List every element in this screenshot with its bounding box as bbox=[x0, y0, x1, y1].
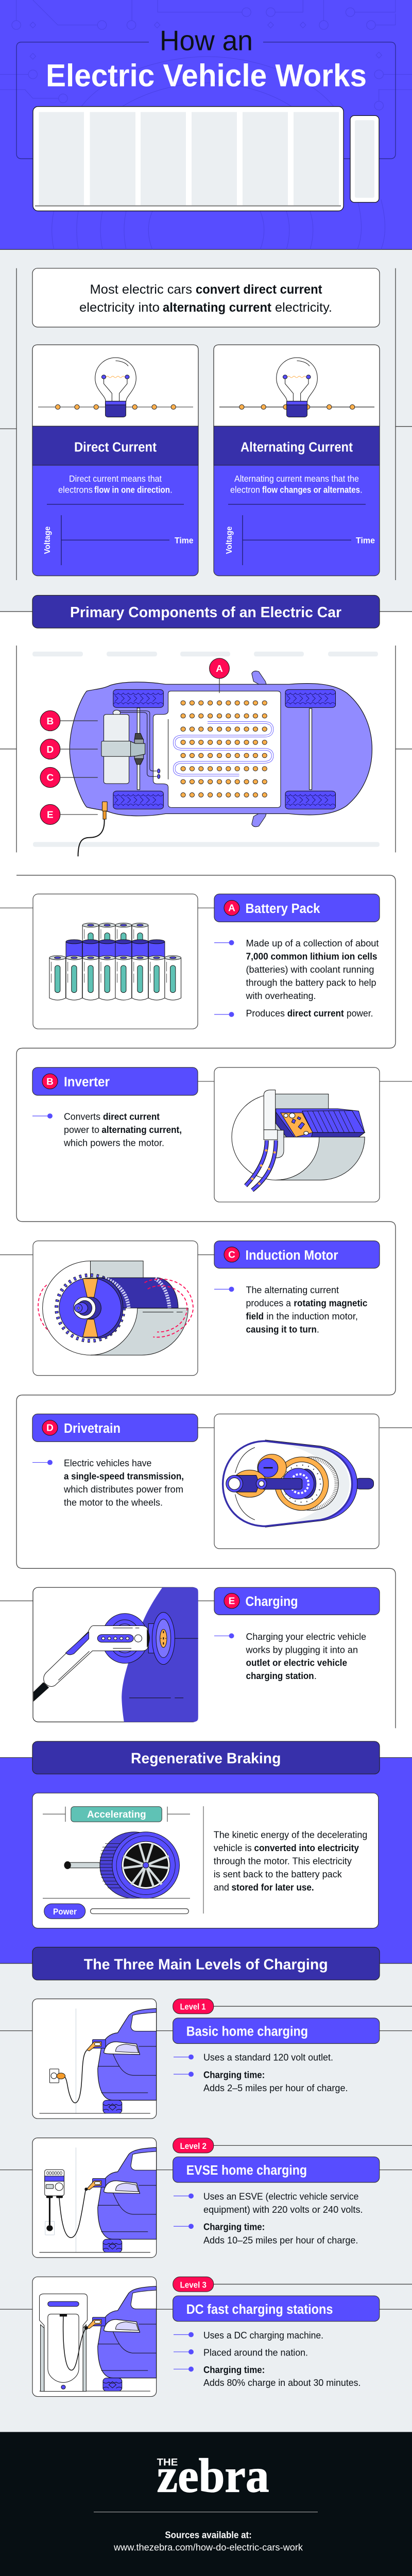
chart: direct current axes: Time bbox=[175, 536, 194, 546]
panel: alternating current bbox=[214, 345, 380, 576]
intro callout: electricity into bbox=[79, 301, 160, 315]
chart: alternating current axes bbox=[225, 515, 375, 565]
heading: three levels bbox=[32, 1947, 380, 1980]
panel: alternating current: Alternating current means that the bbox=[234, 473, 359, 484]
text: inverter bullet: power to bbox=[64, 1124, 99, 1135]
heading: basic home charging: Basic home charging bbox=[186, 2024, 308, 2039]
heading: battery pack: Battery Pack bbox=[245, 902, 320, 916]
footer logo: zebra bbox=[157, 2449, 269, 2502]
badge letters: C bbox=[47, 772, 54, 783]
panel: inverter image bbox=[214, 1067, 380, 1202]
badge letters: D bbox=[47, 744, 54, 755]
panel: direct current bbox=[32, 345, 198, 576]
panel: direct current: flow in one direction bbox=[94, 485, 170, 495]
connector lines: levels bbox=[0, 2006, 412, 2309]
heading: three levels: The Three Main Levels of Charging bbox=[84, 1957, 328, 1973]
icon: level 1 car at wall outlet bbox=[40, 2009, 157, 2113]
text: induction motor bullet: The alternating current bbox=[246, 1284, 339, 1295]
chart: direct current axes: Voltage bbox=[43, 526, 52, 554]
footer sources bbox=[113, 2530, 303, 2552]
panel: induction motor image bbox=[33, 1241, 198, 1376]
road dashes bbox=[32, 652, 380, 847]
title bbox=[46, 25, 367, 93]
chart: direct current axes bbox=[43, 515, 193, 565]
battery pack floor bbox=[153, 691, 281, 807]
text: charging bullet: . bbox=[314, 1670, 317, 1681]
icon: wheel bbox=[64, 1832, 179, 1899]
text: charging bullet: charging station bbox=[246, 1670, 314, 1681]
motor and drivetrain bbox=[101, 710, 160, 784]
title: Electric Vehicle Works bbox=[46, 58, 367, 93]
heading: inverter bbox=[32, 1067, 198, 1095]
intro callout: alternating current bbox=[163, 301, 271, 315]
heading: induction motor bbox=[214, 1241, 380, 1268]
heading: primary components bbox=[32, 596, 380, 628]
text: level 2 bullets: Adds 10–25 miles per hour of charge. bbox=[203, 2234, 358, 2245]
power bar: Power bbox=[53, 1907, 77, 1917]
badge letters: A bbox=[216, 663, 223, 674]
text: level 3 bullets: Uses a DC charging machine. bbox=[203, 2330, 323, 2341]
icon: level 2 car at home charger bbox=[40, 2147, 157, 2252]
text: battery pack bullets: with overheating. bbox=[246, 990, 316, 1001]
header frame bbox=[16, 42, 396, 159]
charger display digits: 000000 bbox=[46, 2171, 62, 2176]
text: induction motor bullet: causing it to turn bbox=[246, 1324, 317, 1335]
text: level 3 bullets bbox=[174, 2330, 360, 2388]
panel: level 2 image bbox=[32, 2138, 157, 2258]
text: level 2 bullets bbox=[174, 2191, 363, 2245]
heading: EVSE home charging: EVSE home charging bbox=[186, 2163, 307, 2178]
badge letters: B bbox=[47, 716, 54, 726]
heading: DC fast charging bbox=[173, 2296, 380, 2321]
text: induction motor bullet: field bbox=[246, 1311, 264, 1321]
text: regenerative explanation: converted into electricity bbox=[254, 1842, 359, 1853]
heading: primary components: Primary Components of an Electric Car bbox=[70, 604, 341, 621]
text: regenerative explanation: is sent back to the battery pack bbox=[214, 1869, 342, 1879]
footer sources: www.thezebra.com/how-do-electric-cars-work bbox=[113, 2542, 303, 2552]
text: charging bullet: outlet or electric vehicle bbox=[246, 1657, 347, 1668]
text: level 3 bullets: Placed around the nation. bbox=[203, 2347, 308, 2358]
text: level 2 bullets: Uses an ESVE (electric vehicle service bbox=[203, 2191, 358, 2201]
panel: charging image bbox=[33, 1587, 198, 1722]
car diagram bbox=[40, 658, 372, 856]
text: level 3 bullets: Adds 80% charge in about 30 minutes. bbox=[203, 2377, 360, 2388]
text: battery pack bullets bbox=[214, 938, 379, 1019]
text: regenerative explanation bbox=[214, 1829, 367, 1893]
accelerating label bbox=[43, 1807, 190, 1822]
charging cable bbox=[78, 802, 107, 856]
intro callout: Most electric cars bbox=[90, 283, 192, 297]
text: regenerative explanation: stored for later use. bbox=[232, 1882, 314, 1893]
icon: empty battery bbox=[33, 107, 379, 211]
accelerating label: Accelerating bbox=[87, 1809, 146, 1820]
text: induction motor bullet: . bbox=[317, 1324, 319, 1335]
text: battery pack bullets: direct current bbox=[287, 1008, 344, 1019]
text: drivetrain bullet: which distributes power from bbox=[63, 1484, 183, 1495]
axles bbox=[137, 708, 312, 790]
text: drivetrain bullet bbox=[32, 1458, 184, 1507]
badge letters bbox=[47, 663, 223, 820]
icon: light bulb alternating current bbox=[219, 358, 374, 417]
header circuit pattern bbox=[0, 0, 412, 249]
text: induction motor bullet: produces a bbox=[246, 1298, 291, 1309]
text: level 1 bullets: Adds 2–5 miles per hour of charge. bbox=[203, 2082, 348, 2093]
icon: inverter unit bbox=[232, 1090, 365, 1190]
text: regenerative explanation: vehicle is bbox=[214, 1842, 252, 1853]
panel: alternating current: Alternating Current bbox=[241, 440, 353, 455]
heading: basic home charging bbox=[173, 2018, 380, 2044]
text: battery pack bullets: power. bbox=[347, 1008, 373, 1019]
wheels bbox=[113, 689, 336, 809]
text: battery pack bullets: Made up of a collection of about bbox=[246, 938, 379, 948]
badges bbox=[40, 658, 229, 825]
title: How an bbox=[160, 25, 253, 56]
icon: side mirrors bbox=[252, 671, 267, 827]
text: inverter bullet: alternating current, bbox=[101, 1124, 182, 1135]
heading: regenerative braking: Regenerative Braking bbox=[131, 1751, 281, 1767]
text: charging bullet: works by plugging it into an bbox=[246, 1644, 358, 1655]
icon: battery cells bbox=[49, 923, 181, 1000]
panel: level 3 image bbox=[32, 2277, 157, 2397]
text: level 2 bullets: Charging time: bbox=[203, 2222, 265, 2232]
footer divider bbox=[94, 2512, 318, 2513]
text: regenerative explanation: The kinetic energy of the decelerating bbox=[214, 1829, 367, 1840]
section frame lines: car diagram bbox=[0, 646, 412, 853]
panel: level 1 image bbox=[32, 1999, 157, 2119]
heading: drivetrain: Drivetrain bbox=[64, 1421, 121, 1436]
heading: charging bbox=[214, 1587, 380, 1615]
panel: battery pack image bbox=[33, 894, 198, 1029]
panel: alternating current: flow changes or alternates bbox=[262, 485, 360, 495]
heading: charging: E bbox=[229, 1596, 235, 1606]
heading: inverter: B bbox=[46, 1076, 54, 1087]
icon: level 3 car at fast charger bbox=[40, 2286, 157, 2391]
power bar bbox=[44, 1904, 188, 1919]
badge letters: E bbox=[47, 809, 54, 820]
level 2 tag bbox=[173, 2138, 214, 2153]
level 2 tag: Level 2 bbox=[180, 2141, 207, 2151]
text: drivetrain bullet: a single-speed transmission, bbox=[64, 1471, 184, 1481]
text: regenerative explanation: through the motor. This electricity bbox=[214, 1856, 352, 1867]
heading: DC fast charging: DC fast charging stations bbox=[186, 2302, 333, 2317]
panel: alternating current: electron bbox=[230, 485, 260, 495]
connector lines bbox=[0, 908, 412, 1601]
text: charging bullet bbox=[214, 1631, 366, 1681]
text: induction motor bullet bbox=[214, 1284, 367, 1335]
chart: alternating current axes: Time bbox=[356, 536, 375, 546]
leader lines bbox=[60, 679, 219, 815]
chart: alternating current axes: Voltage bbox=[225, 526, 234, 554]
footer sources: Sources available at: bbox=[165, 2530, 252, 2540]
intro callout bbox=[32, 268, 380, 327]
panel: direct current: electrons bbox=[58, 485, 93, 495]
heading: battery pack: A bbox=[228, 903, 235, 913]
text: level 2 bullets: equipment) with 220 volts or 240 volts. bbox=[203, 2204, 363, 2215]
panel: direct current: Direct Current bbox=[74, 440, 157, 455]
text: level 3 bullets: Charging time: bbox=[203, 2364, 265, 2375]
text: battery pack bullets: Produces bbox=[246, 1008, 285, 1019]
panel: drivetrain image bbox=[214, 1414, 379, 1549]
text: regenerative explanation: and bbox=[214, 1882, 229, 1893]
wiring bbox=[118, 711, 157, 776]
heading: drivetrain: D bbox=[46, 1422, 54, 1433]
text: inverter bullet: Converts bbox=[64, 1111, 100, 1122]
text: level 1 bullets: Uses a standard 120 volt outlet. bbox=[203, 2052, 333, 2063]
heading: charging: Charging bbox=[245, 1595, 298, 1609]
heading: drivetrain bbox=[32, 1414, 198, 1442]
text: level 1 bullets: Charging time: bbox=[203, 2070, 265, 2080]
icon: charging plug bbox=[33, 1587, 198, 1722]
icon: light bulb direct current bbox=[38, 358, 193, 417]
text: inverter bullet: which powers the motor. bbox=[63, 1138, 164, 1148]
icon: induction motor bbox=[38, 1261, 193, 1355]
text: inverter bullet bbox=[32, 1111, 182, 1148]
heading: induction motor: C bbox=[228, 1249, 235, 1260]
text: charging bullet: Charging your electric vehicle bbox=[246, 1631, 366, 1642]
text: battery pack bullets: (batteries) with coolant running bbox=[246, 964, 374, 975]
text: battery pack bullets: 7,000 common lithium ion cells bbox=[246, 951, 377, 961]
heading: EVSE home charging bbox=[173, 2157, 380, 2182]
level 3 tag bbox=[173, 2277, 214, 2292]
text: induction motor bullet: rotating magnetic bbox=[294, 1298, 367, 1309]
car body bbox=[70, 682, 372, 816]
text: level 1 bullets bbox=[174, 2052, 348, 2093]
text: battery pack bullets: through the battery pack to help bbox=[246, 977, 376, 988]
panel: alternating current: . bbox=[360, 485, 363, 495]
heading: inverter: Inverter bbox=[64, 1075, 110, 1090]
panel: regenerative braking bbox=[32, 1793, 379, 1928]
panel: direct current: Direct current means that bbox=[69, 473, 162, 484]
text: induction motor bullet: in the induction motor, bbox=[266, 1311, 358, 1321]
footer logo: THE bbox=[157, 2457, 178, 2468]
text: inverter bullet: direct current bbox=[103, 1111, 160, 1122]
panel: direct current: . bbox=[170, 485, 173, 495]
heading: regenerative braking bbox=[32, 1741, 380, 1774]
level 3 tag: Level 3 bbox=[180, 2280, 207, 2290]
intro callout: convert direct current bbox=[196, 283, 322, 297]
section frame lines: intro bbox=[0, 268, 412, 580]
text: drivetrain bullet: Electric vehicles have bbox=[64, 1458, 151, 1468]
level 1 tag bbox=[173, 1999, 214, 2014]
level 1 tag: Level 1 bbox=[180, 2002, 205, 2012]
snake frame bbox=[16, 875, 396, 1728]
icon: drivetrain bbox=[223, 1440, 374, 1527]
heading: induction motor: Induction Motor bbox=[245, 1248, 338, 1263]
heading: battery pack bbox=[214, 894, 380, 922]
intro callout: electricity. bbox=[275, 301, 332, 315]
text: drivetrain bullet: the motor to the wheels. bbox=[64, 1497, 163, 1507]
